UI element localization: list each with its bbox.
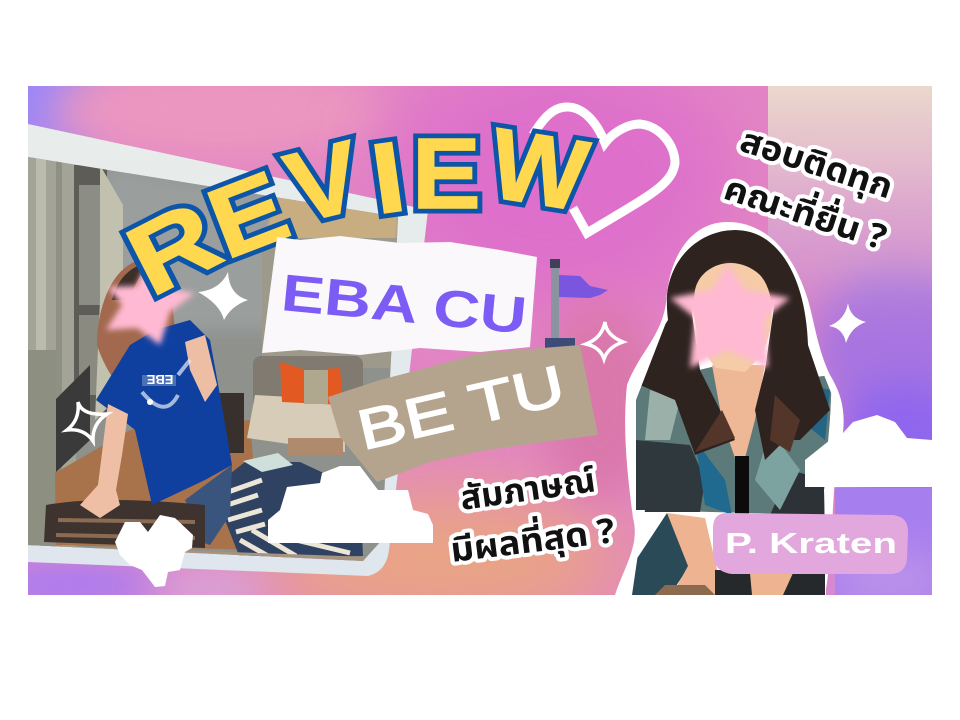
shirt print [142, 360, 190, 407]
icon: sparkle outline lower left [67, 402, 107, 441]
floor [55, 420, 260, 550]
title: REVIEW: W [483, 108, 596, 233]
icon: sparkle white solid near left figure [198, 272, 248, 320]
text: question bottom centre: สัมภาษณ์ [457, 456, 599, 526]
icon: blurred pink star over face [670, 264, 790, 368]
icon: white pixel heart [115, 515, 193, 587]
panel: white torn paper EBA CU [262, 236, 537, 355]
icon: white cloud right [805, 415, 932, 487]
jacket [636, 365, 832, 515]
shirt print: EBE [146, 372, 173, 387]
text: question bottom centre [448, 456, 618, 578]
black top [735, 456, 749, 516]
panel: tan torn paper BE TU [328, 345, 598, 482]
text: EBA CU: EBA CU [279, 264, 529, 346]
person: left figure [80, 261, 232, 518]
icon: white cloud left [268, 466, 433, 543]
photo scene [28, 150, 408, 570]
title: REVIEW: R [110, 179, 237, 318]
title: REVIEW: R [110, 179, 237, 318]
title: REVIEW: W [483, 108, 596, 233]
text: question bottom centre: มีผลที่สุด ? [448, 506, 618, 578]
photo: right person cutout [615, 222, 844, 600]
neck and chest [712, 365, 765, 458]
orange pillow [280, 362, 343, 405]
icon: pixel heart outline [533, 107, 675, 233]
text: question top right [717, 117, 899, 265]
title: REVIEW: I [364, 119, 412, 235]
title: REVIEW [110, 108, 596, 318]
text: BE TU: BE TU [352, 353, 570, 462]
arm [80, 404, 128, 518]
title: REVIEW: V [275, 120, 372, 245]
curtain [28, 150, 76, 550]
hair [97, 262, 174, 376]
hand bag tag [243, 453, 293, 472]
photo: mirror selfie in hotel room [28, 124, 428, 576]
label: P. Kraten: P. Kraten [725, 528, 897, 560]
title: REVIEW: E [194, 150, 302, 280]
icon: sparkle solid right [829, 303, 866, 343]
text: question top right: สอบติดทุก [733, 117, 899, 214]
icon: sparkle outline near flag [586, 322, 623, 359]
photo frame [28, 124, 428, 576]
white outline [615, 222, 844, 595]
blue t-shirt [96, 320, 232, 505]
label: P. Kraten [713, 513, 908, 574]
panel: gradient background [28, 86, 932, 595]
bed [253, 356, 363, 405]
arms [632, 513, 688, 595]
title: REVIEW: V [275, 120, 372, 245]
window [74, 165, 107, 415]
face [694, 263, 772, 372]
denim shorts [185, 465, 232, 545]
title: REVIEW: E [194, 150, 302, 280]
icon: blurred pink star over face [106, 262, 195, 345]
backpack [222, 462, 363, 558]
chair [44, 500, 205, 548]
hair [640, 230, 830, 460]
title: REVIEW: E [412, 117, 481, 230]
title: REVIEW: I [364, 119, 412, 235]
text: question top right: คณะที่ยื่น ? [717, 164, 893, 265]
title: REVIEW: E [412, 117, 481, 230]
icon: pixel flag [545, 259, 608, 348]
